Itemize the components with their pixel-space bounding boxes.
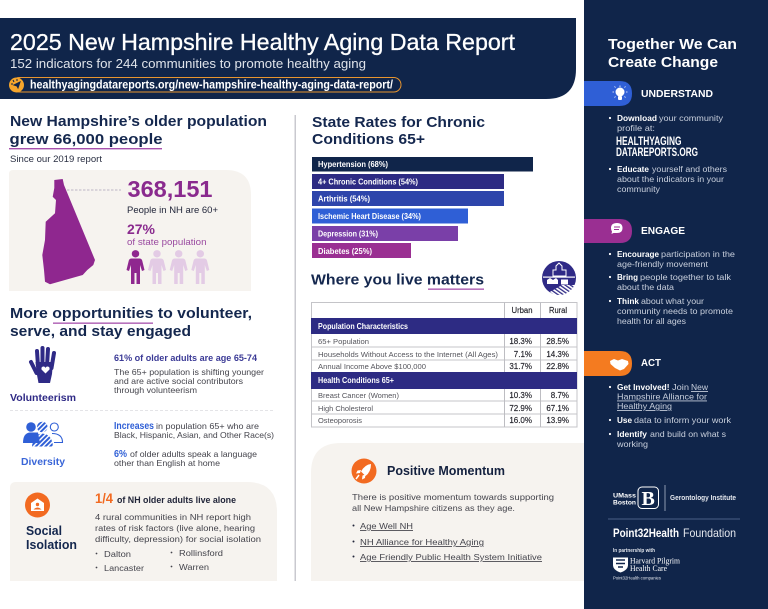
stat label: People in NH are 60+ xyxy=(127,205,218,216)
text: diversity facts: other than English at home xyxy=(114,459,220,468)
table: urban vs rural xyxy=(311,302,577,427)
text: diversity facts: Increases xyxy=(114,421,154,432)
bar: ischemic heart disease: Ischemic Heart Disease (34%) xyxy=(318,212,421,221)
icon: people 1 of 4 xyxy=(126,250,209,284)
heading: New Hampshire’s older population xyxy=(10,113,267,130)
logo: Point32Health Foundation: Foundation xyxy=(683,526,736,540)
url wordmark xyxy=(616,134,698,159)
row: osteoporosis: Osteoporosis xyxy=(318,416,362,425)
row band: population characteristics: Population Characteristics xyxy=(318,322,409,331)
understand tab xyxy=(584,81,713,106)
engage list: people together to talk xyxy=(640,272,732,282)
logo: Harvard Pilgrim Health Care: Health Care xyxy=(630,564,667,573)
understand list: your community xyxy=(659,113,724,123)
text: diversity facts: in population 65+ who are xyxy=(156,422,259,431)
engage list: age-friendly movement xyxy=(617,259,709,269)
row: high cholesterol: 72.9% xyxy=(509,404,532,413)
bar: arthritis xyxy=(312,191,504,206)
sidebar heading: Together We Can xyxy=(608,37,737,53)
sidebar heading xyxy=(608,37,737,71)
row band: health conditions: Health Conditions 65+ xyxy=(318,376,394,385)
act tab xyxy=(584,351,662,376)
sidebar heading: Create Change xyxy=(608,55,718,71)
engage tab: ENGAGE xyxy=(641,225,685,237)
sidebar xyxy=(584,0,768,609)
heading: social isolation: Social xyxy=(26,523,62,538)
act list: Use xyxy=(617,415,632,425)
row: internet access: 7.1% xyxy=(514,350,532,359)
column headers xyxy=(512,306,567,315)
icon: speech bubble xyxy=(611,223,622,234)
bar: hypertension: Hypertension (68%) xyxy=(318,160,388,169)
stat: one in four: 1/4 xyxy=(95,490,113,506)
row: breast cancer: 10.3% xyxy=(509,391,532,400)
text: intro: all New Hampshire citizens as they age. xyxy=(352,503,515,513)
act tab: ACT xyxy=(641,357,662,369)
row: high cholesterol xyxy=(318,404,569,413)
section: population growth xyxy=(9,113,267,291)
row: high cholesterol: High Cholesterol xyxy=(318,404,373,413)
list: communities: Dalton xyxy=(104,549,131,559)
row band: population characteristics xyxy=(311,318,577,334)
act list: Get Involved! xyxy=(617,382,670,392)
text: diversity facts xyxy=(114,421,274,468)
understand list: profile at: xyxy=(617,123,655,133)
logo: UMass Boston Gerontology Institute: UMass xyxy=(613,492,636,500)
icon: hand with heart xyxy=(31,348,54,383)
engage list: Bring xyxy=(617,272,638,282)
header banner xyxy=(0,18,576,99)
bar chart xyxy=(312,157,533,258)
engage list: Think xyxy=(617,296,639,306)
act list: Identify xyxy=(617,429,647,439)
icon: light bulb xyxy=(612,86,628,100)
text: risk factors: difficulty, depression) for social isolation xyxy=(95,534,261,544)
section: where you live xyxy=(311,261,577,427)
icon: house xyxy=(25,492,50,518)
list: communities: Warren xyxy=(179,562,209,572)
column headers: Rural xyxy=(549,306,567,315)
row: 65+ population xyxy=(318,337,569,346)
icon: handshake xyxy=(610,359,628,370)
stat: 368,151: 368,151 xyxy=(128,176,213,202)
engage list: community needs to promote xyxy=(617,306,733,316)
bar: arthritis: Arthritis (54%) xyxy=(318,194,370,204)
bar: hypertension xyxy=(312,157,533,172)
text: volunteerism facts xyxy=(114,353,264,395)
bar: depression: Depression (31%) xyxy=(318,230,378,238)
understand list: yourself and others xyxy=(652,164,727,174)
stat: one in four: of NH older adults live alone xyxy=(117,495,236,505)
bar: ischemic heart disease xyxy=(312,208,468,224)
row: breast cancer: 8.7% xyxy=(551,391,569,400)
row: annual income: Annual Income Above $100,000 xyxy=(318,362,426,371)
engage tab xyxy=(584,219,685,243)
logo: Point32Health Foundation xyxy=(613,526,736,540)
title: 2025 New Hampshire Healthy Aging Data Report xyxy=(10,29,515,55)
bar: 4+ chronic conditions: 4+ Chronic Conditions (54%) xyxy=(318,178,418,186)
row: high cholesterol: 67.1% xyxy=(546,404,569,413)
logo: Harvard Pilgrim Health Care xyxy=(613,548,681,582)
bar: depression xyxy=(312,226,458,241)
logo: UMass Boston Gerontology Institute: B xyxy=(642,488,655,510)
panel: positive momentum xyxy=(311,443,584,581)
list: links: NH Alliance for Healthy Aging xyxy=(360,537,484,547)
stat: 27%: 27% xyxy=(127,222,155,237)
logo: Harvard Pilgrim Health Care: Point32Health companies xyxy=(613,576,662,582)
row: osteoporosis: 13.9% xyxy=(546,416,569,425)
logo: Point32Health Foundation: Point32Health xyxy=(613,526,679,540)
logo: UMass Boston Gerontology Institute: Gerontology Institute xyxy=(670,495,736,502)
icon: click cursor xyxy=(9,78,24,92)
text: intro: There is positive momentum towards supporting xyxy=(352,492,554,502)
heading xyxy=(9,113,267,149)
url wordmark: HEALTHYAGING xyxy=(616,134,682,148)
list: links: Age Well NH xyxy=(360,521,413,531)
url wordmark: DATAREPORTS.ORG xyxy=(616,145,698,159)
icon: diversity people xyxy=(23,422,62,446)
row: internet access: 14.3% xyxy=(546,350,569,359)
act list: and build on what s xyxy=(650,429,726,439)
section: opportunities xyxy=(10,305,274,468)
logo: UMass Boston Gerontology Institute: Boston xyxy=(613,500,636,506)
engage list: Encourage xyxy=(617,249,659,259)
divider between columns xyxy=(294,115,296,581)
row: breast cancer: Breast Cancer (Women) xyxy=(318,391,399,400)
act list: Hampshire Alliance for xyxy=(617,392,707,402)
panel: population stat xyxy=(9,170,251,291)
row: annual income xyxy=(318,362,569,371)
logo: Harvard Pilgrim Health Care: In partnership with xyxy=(613,548,655,554)
stat label: of state population xyxy=(127,237,206,248)
logo: Harvard Pilgrim Health Care: Harvard Pilgrim xyxy=(630,556,681,566)
row: osteoporosis: 16.0% xyxy=(509,416,532,425)
heading: More opportunities to volunteer, xyxy=(10,305,252,322)
engage list: participation in the xyxy=(661,249,735,259)
understand list: Educate xyxy=(617,164,649,174)
engage list: about what your xyxy=(641,296,704,306)
row: osteoporosis xyxy=(318,416,569,425)
heading: social isolation xyxy=(26,523,77,552)
engage list: about the data xyxy=(617,282,674,292)
list: communities: Rollinsford xyxy=(179,548,223,558)
text: risk factors: 4 rural communities in NH report high xyxy=(95,512,251,522)
list: communities xyxy=(96,548,223,573)
label: diversity: Diversity xyxy=(21,457,65,468)
heading: grew 66,000 people xyxy=(10,131,162,148)
list: links: Age Friendly Public Health System Initiative xyxy=(360,552,542,562)
row: annual income: 31.7% xyxy=(509,362,532,371)
heading: State Rates for Chronic xyxy=(312,114,485,131)
subtitle: 152 indicators for 244 communities to promote healthy aging xyxy=(10,56,366,71)
act list xyxy=(609,382,732,449)
engage list xyxy=(609,249,735,326)
panel: social isolation xyxy=(10,482,277,581)
act list: New xyxy=(691,382,709,392)
heading xyxy=(312,114,485,148)
text: diversity facts: Black, Hispanic, Asian, and Other Race(s) xyxy=(114,431,274,440)
heading: Where you live matters xyxy=(311,272,484,288)
act list: data to inform your work xyxy=(634,415,732,425)
bar: diabetes xyxy=(312,243,411,258)
row: 65+ population: 28.5% xyxy=(546,337,569,346)
understand list: about the indicators in your xyxy=(617,174,724,184)
text: risk factors: rates of risk factors (live alone, hearing xyxy=(95,523,255,533)
heading: serve, and stay engaged xyxy=(10,323,191,340)
understand tab: UNDERSTAND xyxy=(641,88,713,100)
understand list: community xyxy=(617,184,661,194)
list: links xyxy=(352,521,542,562)
bar: 4+ chronic conditions xyxy=(312,174,504,189)
act list: Healthy Aging xyxy=(617,401,672,411)
logo: UMass Boston Gerontology Institute xyxy=(613,485,736,511)
column headers: Urban xyxy=(512,306,532,315)
section: chronic conditions xyxy=(312,114,533,258)
engage list: health for all ages xyxy=(617,316,686,326)
stat: one in four xyxy=(95,490,236,506)
url pill: healthyagingdatareports.org/new-hampshire-healthy-aging-data-report/ xyxy=(30,80,394,92)
act list: working xyxy=(616,439,648,449)
text: diversity facts: of older adults speak a language xyxy=(130,450,257,459)
row: 65+ population: 18.3% xyxy=(509,337,532,346)
label: volunteerism: Volunteerism xyxy=(10,393,76,404)
text: volunteerism facts: through volunteerism xyxy=(114,386,197,395)
row: breast cancer xyxy=(318,391,569,400)
row band: health conditions xyxy=(311,372,577,389)
heading: social isolation: Isolation xyxy=(26,537,77,552)
heading xyxy=(10,305,252,340)
heading: Positive Momentum xyxy=(387,464,505,478)
since note: Since our 2019 report xyxy=(10,154,102,165)
text: volunteerism facts: The 65+ population is shifting younger xyxy=(114,368,264,377)
row: internet access: Households Without Access to the Internet (All Ages) xyxy=(318,350,498,359)
row: 65+ population: 65+ Population xyxy=(318,337,369,346)
text: risk factors xyxy=(95,512,261,544)
icon: rocket xyxy=(352,458,376,484)
icon: NH state map xyxy=(42,179,95,284)
heading: Conditions 65+ xyxy=(312,131,425,148)
row: annual income: 22.8% xyxy=(546,362,569,371)
understand list: Download xyxy=(617,113,657,123)
icon: town and farm xyxy=(542,261,576,295)
text: diversity facts: 6% xyxy=(114,449,127,460)
bar: diabetes: Diabetes (25%) xyxy=(318,247,372,256)
text: volunteerism facts: and are active social contributors xyxy=(114,377,243,386)
list: communities: Lancaster xyxy=(104,563,144,573)
text: intro xyxy=(352,492,554,513)
text: volunteerism facts: 61% of older adults are age 65-74 xyxy=(114,353,258,364)
understand list xyxy=(609,113,727,194)
act list: Join xyxy=(672,382,689,392)
